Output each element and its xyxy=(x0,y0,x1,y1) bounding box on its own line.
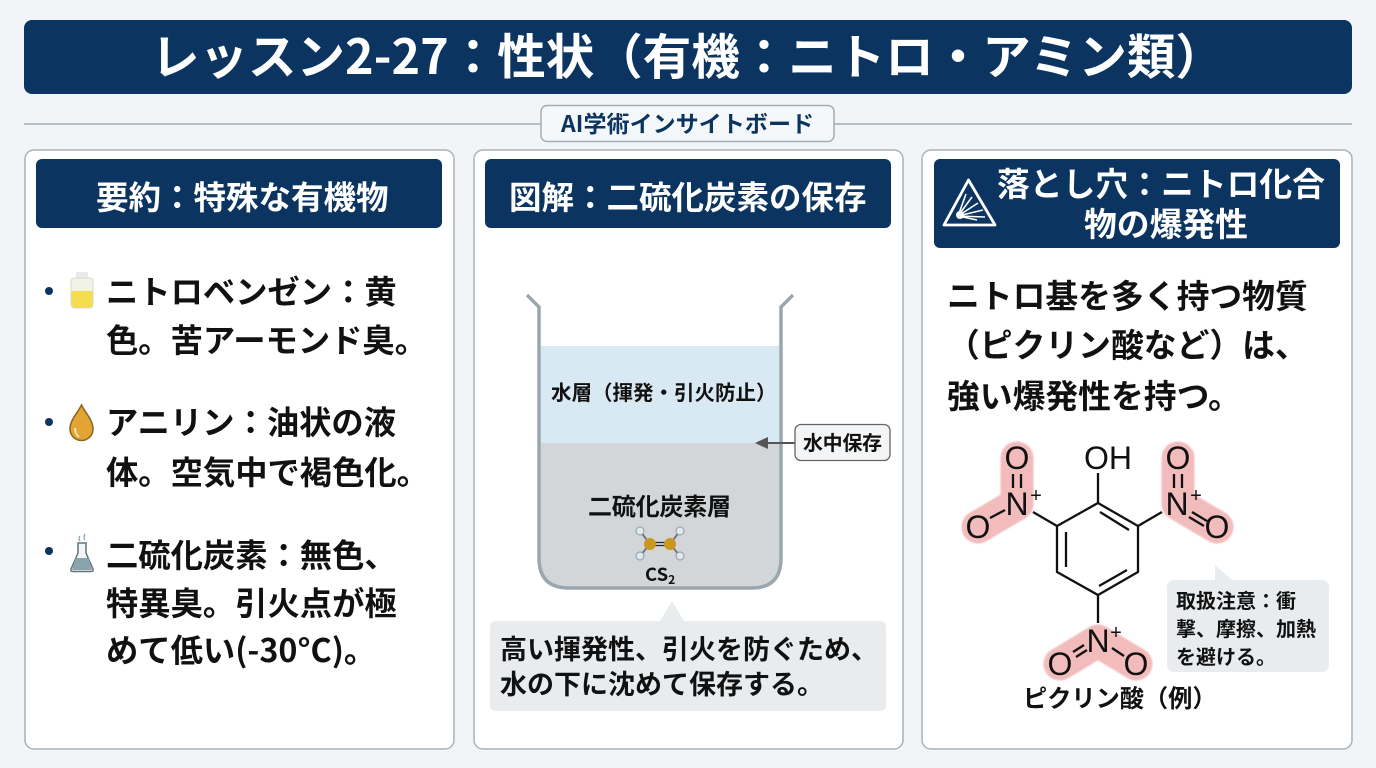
list item: aniline: アニリン：油状の液 xyxy=(106,398,396,444)
chart: picric acid structure xyxy=(966,440,1229,682)
heading: diagram: 図解：二硫化炭素の保存 xyxy=(509,172,867,219)
list item: carbon disulfide: 二硫化炭素：無色、 xyxy=(106,531,397,577)
panel: diagram xyxy=(474,150,903,749)
list item: nitrobenzene xyxy=(45,268,427,362)
atom labels: O xyxy=(1124,646,1148,682)
list item: nitrobenzene: 色。苦アーモンド臭。 xyxy=(106,316,427,362)
atom labels: + xyxy=(1110,622,1122,644)
icon: oil drop xyxy=(70,405,93,440)
label: water layer: 水層（揮発・引火防止） xyxy=(551,376,776,406)
icon: molecule xyxy=(636,527,684,560)
label: water storage xyxy=(795,424,890,460)
list item: carbon disulfide: 特異臭。引火点が極 xyxy=(106,579,397,625)
atom labels: + xyxy=(1030,485,1042,507)
list item: aniline xyxy=(45,398,429,494)
callout: storage reason xyxy=(490,601,886,711)
panel: pitfall xyxy=(922,150,1352,749)
icon: flask xyxy=(71,534,93,572)
arrow: water storage xyxy=(755,437,795,449)
icon: explosion warning xyxy=(944,180,995,225)
callout: handling caution: を避ける。 xyxy=(1176,641,1276,670)
label: CS2 formula: CS xyxy=(645,561,668,587)
list item: nitrobenzene: ニトロベンゼン：黄 xyxy=(106,268,397,314)
atom labels: O xyxy=(1166,440,1190,476)
heading: pitfall: 落とし穴：ニトロ化合 xyxy=(997,159,1325,206)
beaker diagram xyxy=(527,295,793,588)
label: water storage: 水中保存 xyxy=(803,427,882,456)
heading: diagram xyxy=(485,159,891,228)
list item: carbon disulfide: めて低い(-30°C)。 xyxy=(106,626,376,672)
label: CS2 formula: 2 xyxy=(668,571,675,588)
atom labels: OH xyxy=(1084,440,1132,476)
heading: summary: 要約：特殊な有機物 xyxy=(96,172,389,219)
caption: picric acid: ピクリン酸（例） xyxy=(1023,679,1217,714)
text block: warning xyxy=(947,271,1308,418)
atom labels: O xyxy=(966,509,990,545)
title banner: レッスン2-27：性状（有機：ニトロ・アミン類） xyxy=(151,18,1224,88)
heading: pitfall: 物の爆発性 xyxy=(1084,199,1248,246)
list item: carbon disulfide xyxy=(45,531,397,672)
panel: summary xyxy=(25,150,454,749)
label: CS2 layer: 二硫化炭素層 xyxy=(588,487,731,522)
text block: warning: （ピクリン酸など）は、 xyxy=(947,320,1308,367)
callout: handling caution: 撃、摩擦、加熱 xyxy=(1176,613,1316,642)
atom labels: + xyxy=(1190,485,1202,507)
atom labels: O xyxy=(1048,646,1072,682)
atom labels: N xyxy=(1005,486,1029,522)
text block: warning: 強い爆発性を持つ。 xyxy=(947,371,1241,418)
callout: handling caution xyxy=(1167,565,1329,672)
atom labels: N xyxy=(1086,623,1110,659)
callout: handling caution: 取扱注意：衝 xyxy=(1176,585,1296,614)
highlight: nitro groups xyxy=(978,458,1217,664)
atom labels: O xyxy=(1005,440,1029,476)
text block: warning: ニトロ基を多く持つ物質 xyxy=(947,271,1308,318)
heading: pitfall xyxy=(934,159,1340,248)
atom labels: O xyxy=(1205,509,1229,545)
atom labels: N xyxy=(1165,486,1189,522)
atom labels xyxy=(966,440,1229,682)
heading: summary xyxy=(36,159,442,228)
callout: storage reason: 水の下に沈めて保存する。 xyxy=(500,663,824,702)
list item: aniline: 体。空気中で褐色化。 xyxy=(106,448,429,494)
subtitle badge: AI学術インサイトボード xyxy=(560,105,814,139)
callout: storage reason: 高い揮発性、引火を防ぐため、 xyxy=(500,628,878,667)
benzene ring and bonds xyxy=(990,473,1207,657)
icon: yellow liquid bottle xyxy=(71,272,93,308)
